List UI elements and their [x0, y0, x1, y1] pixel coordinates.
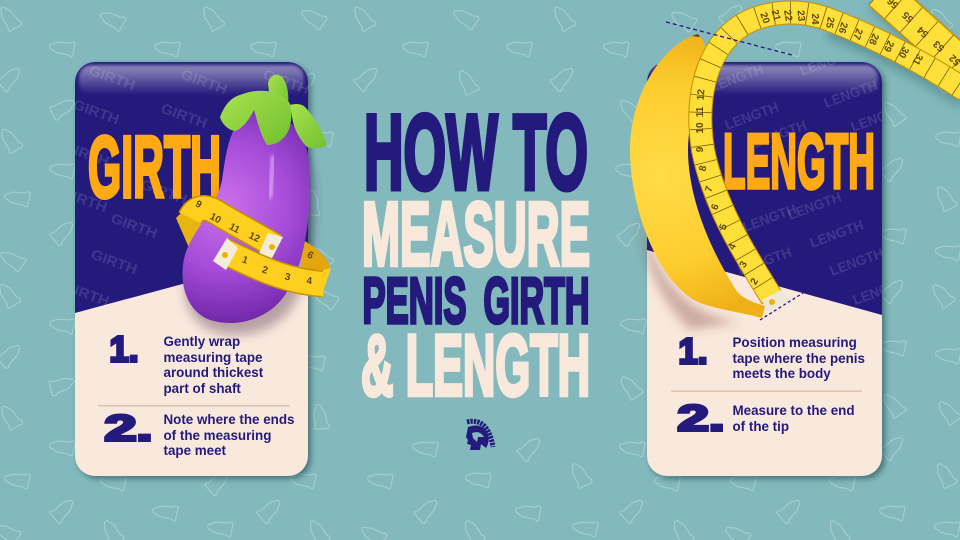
step 1 text: meets the body [732, 366, 831, 381]
icon: banana with measuring tape: 10 [695, 122, 706, 134]
panel: girth: GIRTH [88, 119, 221, 216]
icon: eggplant with measuring tape: 4 [306, 276, 313, 287]
icon: banana with measuring tape: 20 [757, 11, 772, 26]
title line: penis: PENIS [362, 264, 466, 337]
dashed measurement line at base [760, 293, 803, 320]
title [361, 92, 590, 414]
panel: length [647, 45, 909, 479]
panel: girth: GIRTH [87, 62, 138, 93]
eggplant leaves [220, 75, 327, 148]
step 2 number: 2. [104, 408, 152, 448]
panel: length: LENGTH [751, 117, 809, 151]
panel: girth: GIRTH [139, 176, 190, 207]
panel: length: LENGTH [741, 201, 799, 235]
icon: eggplant with measuring tape [176, 75, 331, 335]
step 1 text: around thickest [164, 365, 264, 380]
icon: eggplant with measuring tape: 2 [260, 265, 270, 277]
icon: banana with measuring tape: 12 [696, 88, 708, 101]
tape strip top right [880, 0, 960, 74]
panel: girth: GIRTH [59, 184, 110, 215]
step 2 text: of the measuring [164, 428, 271, 443]
icon: banana with measuring tape: 31 [909, 52, 925, 67]
step 1 number: 1. [110, 328, 138, 370]
icon: banana with measuring tape: 24 [809, 13, 820, 25]
tape long band [700, 13, 960, 298]
step 2 text: tape meet [164, 443, 227, 458]
panel: girth: GIRTH [71, 96, 122, 127]
tape band in front [222, 250, 324, 284]
panel: girth: GIRTH [179, 66, 230, 97]
icon: banana with measuring tape [630, 0, 960, 330]
eggplant body [182, 107, 310, 323]
icon: banana with measuring tape: 8 [698, 164, 710, 172]
icon: banana with measuring tape: 54 [915, 24, 931, 39]
panel: girth [59, 62, 312, 479]
step 2 text: of the tip [732, 419, 789, 434]
step 2 number: 2. [678, 398, 724, 438]
icon: banana with measuring tape: 9 [695, 146, 706, 153]
panel: length: LENGTH [708, 61, 766, 95]
icon: eggplant with measuring tape: 3 [284, 272, 292, 284]
icon: eggplant with measuring tape: 9 [193, 199, 204, 211]
panel: girth: GIRTH [261, 66, 312, 97]
step 1 text: Position measuring [732, 335, 857, 350]
icon: banana with measuring tape: 27 [850, 27, 864, 41]
step 1 text: measuring tape [164, 350, 262, 365]
icon: eggplant with measuring tape: 12 [247, 230, 262, 245]
banana [630, 34, 765, 318]
step 2 text: Note where the ends [164, 412, 294, 427]
panel: girth: GIRTH [89, 246, 140, 277]
panel: length: LENGTH [828, 245, 886, 279]
icon: banana with measuring tape: 23 [795, 10, 806, 22]
icon: spartan helmet logo [466, 421, 493, 450]
tape end tab [762, 290, 790, 312]
icon: banana with measuring tape: 28 [866, 32, 881, 47]
panel: length: LENGTH [798, 45, 856, 79]
panel: girth: GIRTH [61, 278, 112, 309]
panel: length: LENGTH [849, 101, 907, 135]
title line: how to: HOW TO [364, 92, 588, 212]
tape band behind [190, 208, 275, 246]
dashed measurement line at tip [666, 22, 792, 55]
panel: girth: GIRTH [109, 210, 160, 241]
icon: banana with measuring tape: 11 [695, 106, 706, 117]
title line: girth: GIRTH [484, 264, 590, 337]
icon: eggplant with measuring tape: 6 [305, 250, 315, 262]
icon: banana with measuring tape: 4 [727, 242, 739, 252]
step 1 text: Gently wrap [164, 334, 240, 349]
back tape band, right end [300, 240, 330, 290]
panel: length: LENGTH [786, 189, 844, 223]
icon: banana with measuring tape: 7 [704, 185, 716, 194]
step 1 number: 1. [678, 330, 708, 372]
icon: eggplant with measuring tape: 1 [240, 255, 250, 267]
icon: eggplant with measuring tape: 11 [227, 221, 242, 236]
title line: measure: MEASURE [362, 185, 590, 285]
step 2 text: Measure to the end [732, 403, 855, 418]
icon: banana with measuring tape: 26 [836, 21, 849, 35]
icon: banana with measuring tape: 30 [896, 45, 911, 60]
panel: length: LENGTH [851, 274, 909, 308]
step 1 text: tape where the penis [732, 351, 865, 366]
back tape band, left fold [176, 197, 205, 250]
title line: and length: & LENGTH [361, 318, 590, 414]
panel: length: LENGTH [808, 217, 866, 251]
step 1 text: part of shaft [164, 381, 241, 396]
panel: length: LENGTH [723, 99, 781, 133]
icon: banana with measuring tape: 53 [931, 38, 947, 53]
panel: length: LENGTH [822, 77, 880, 111]
tape shadow [830, 28, 960, 98]
icon: banana with measuring tape: 2 [749, 276, 761, 287]
panel: girth: GIRTH [159, 100, 210, 131]
icon: banana with measuring tape: 29 [881, 39, 896, 54]
panel: length: LENGTH [736, 244, 794, 278]
icon: banana with measuring tape: 3 [738, 259, 750, 270]
icon: banana with measuring tape: 21 [769, 9, 782, 23]
icon: banana with measuring tape: 5 [718, 222, 730, 232]
icon: banana with measuring tape: 6 [710, 202, 722, 212]
panel: girth: GIRTH [61, 138, 112, 169]
icon: eggplant with measuring tape: 10 [208, 211, 223, 226]
icon: banana with measuring tape: 55 [900, 9, 916, 24]
icon: banana with measuring tape: 25 [823, 16, 836, 29]
icon: banana with measuring tape: 22 [781, 9, 794, 22]
